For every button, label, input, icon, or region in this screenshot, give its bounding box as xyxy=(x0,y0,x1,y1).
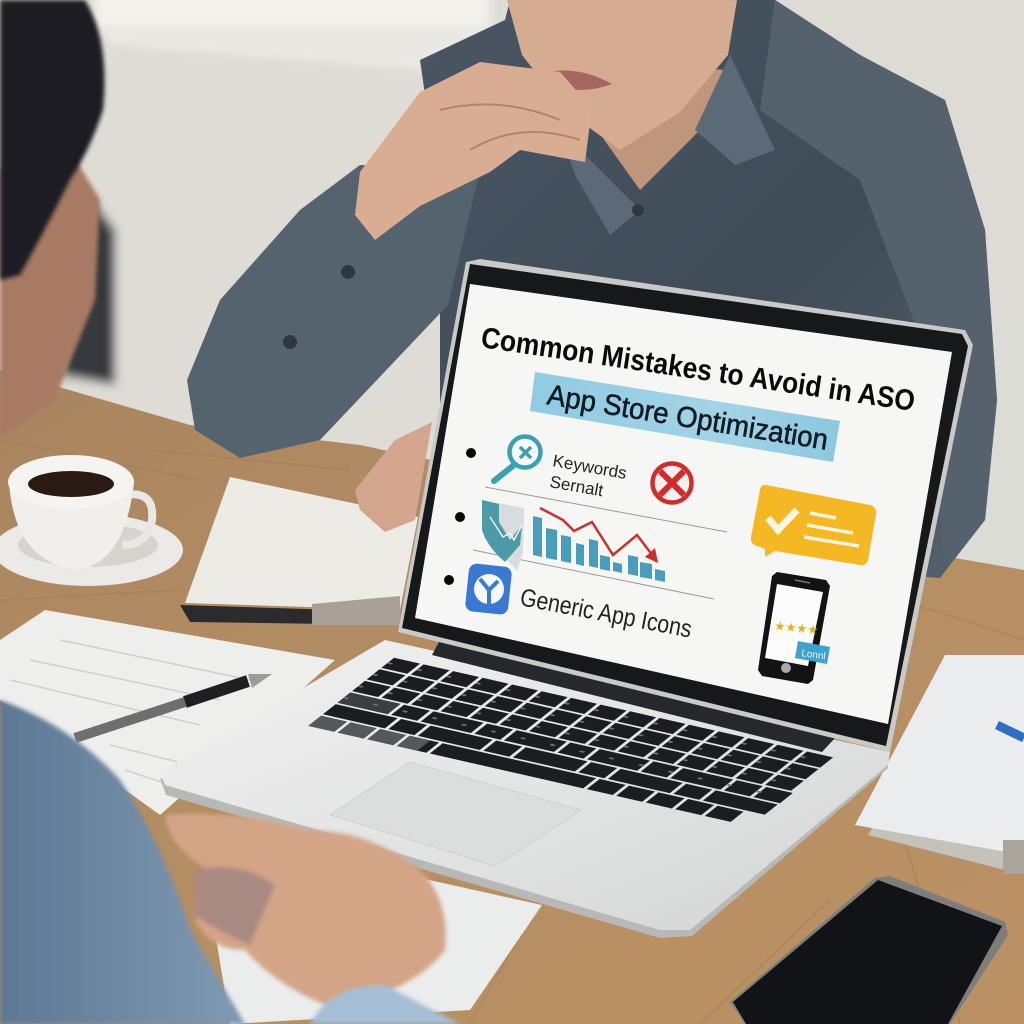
icon: red cross circle xyxy=(652,464,692,502)
screen bezel xyxy=(398,259,973,752)
subtitle band: App Store Optimization xyxy=(545,379,830,457)
laptop xyxy=(160,259,973,938)
keyboard xyxy=(315,663,830,821)
laptop base xyxy=(160,640,890,938)
icon: broken shield xyxy=(482,500,524,571)
coffee cup on saucer xyxy=(0,455,183,586)
hand at chin xyxy=(355,62,592,240)
chair at right xyxy=(960,318,1024,580)
seated man in grey-blue shirt xyxy=(187,0,997,578)
papers left xyxy=(0,610,335,815)
hinge xyxy=(432,640,835,752)
red trend arrow xyxy=(540,508,658,563)
yellow chat bubble xyxy=(751,485,876,565)
text: generic app icons: Generic App Icons xyxy=(518,583,694,643)
text: keywords xyxy=(548,451,628,500)
shoulder highlight xyxy=(760,0,997,570)
resting hand xyxy=(355,422,432,532)
icon: magnifier with x xyxy=(494,436,540,481)
divider lines xyxy=(473,487,727,599)
shirt buttons xyxy=(341,265,355,279)
foreground hands xyxy=(165,814,446,1010)
notebook on table xyxy=(180,477,418,625)
smartphone on table xyxy=(730,876,1008,1024)
screen xyxy=(415,284,952,724)
icon: generic app xyxy=(465,563,512,615)
screen title: Common Mistakes to Avoid in ASO xyxy=(479,321,917,418)
wooden table xyxy=(0,370,1024,1024)
foreground person's head xyxy=(0,0,105,440)
bullet points xyxy=(444,448,476,585)
paper under hands xyxy=(205,870,542,1024)
foreground person's shoulder xyxy=(0,700,460,1024)
papers and clipboard right xyxy=(855,655,1024,874)
star rating: ★★★★ xyxy=(774,618,819,638)
bar chart declining xyxy=(533,516,665,582)
background wall xyxy=(0,0,1024,490)
face xyxy=(507,0,737,150)
collar xyxy=(560,55,775,235)
trackpad xyxy=(330,762,581,866)
text: keywords: Sernalt xyxy=(548,472,605,500)
neck xyxy=(590,60,725,190)
lips xyxy=(548,70,612,90)
sleeve xyxy=(187,165,480,458)
text: keywords: Keywords xyxy=(551,451,628,483)
blue tag: Lonnl xyxy=(801,648,826,662)
pen on papers xyxy=(75,674,272,738)
phone with rating xyxy=(758,572,830,684)
